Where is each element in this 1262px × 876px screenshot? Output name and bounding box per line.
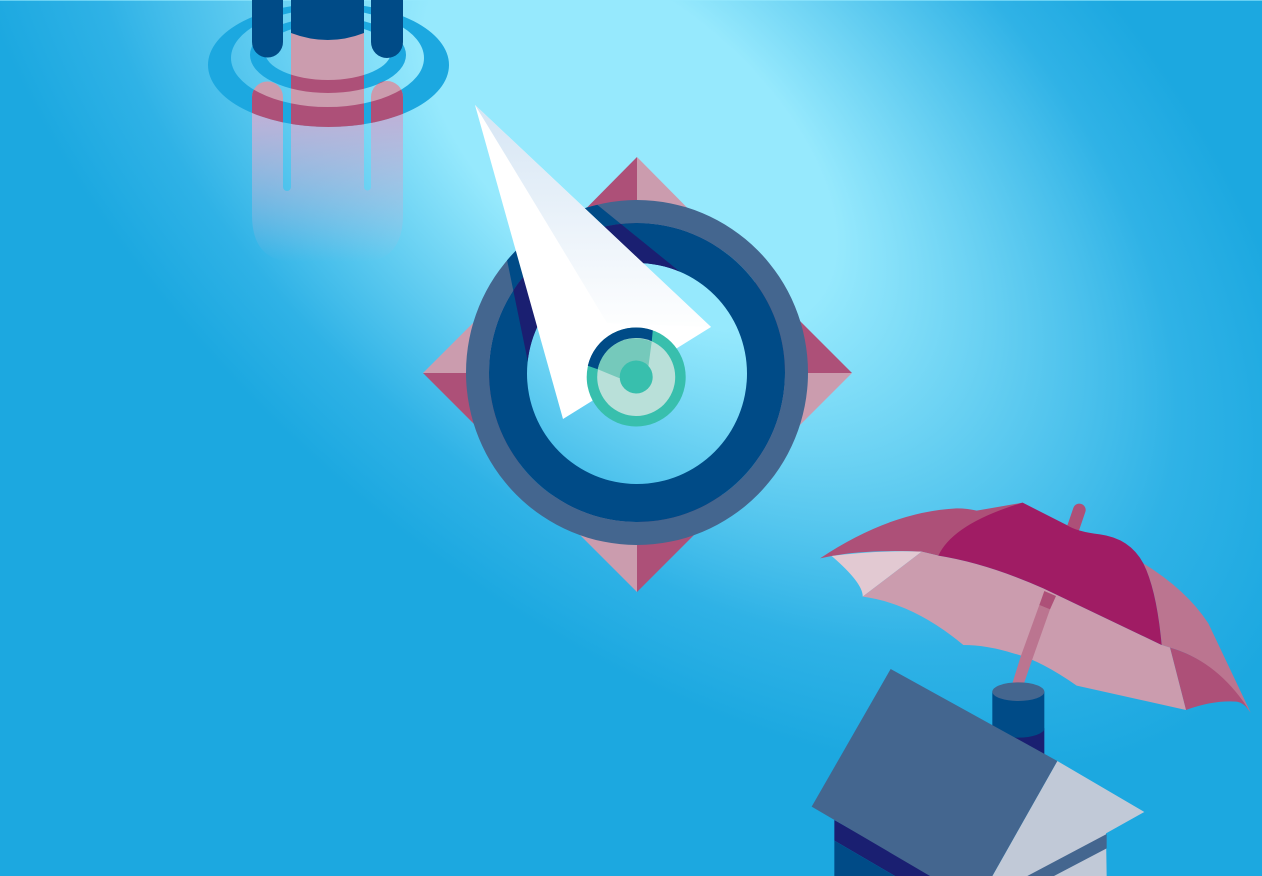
- right panel: [1143, 563, 1251, 713]
- centre leg: [291, 0, 364, 40]
- needle: [475, 105, 711, 419]
- main pink panel: [863, 552, 1186, 710]
- compass: [423, 105, 852, 592]
- back left panel: [820, 503, 1023, 558]
- left leg: [252, 0, 283, 57]
- roof: [812, 669, 1057, 876]
- chimney: [992, 682, 1044, 755]
- shaft seen through canopy: [1012, 591, 1056, 683]
- right gable and wall: [992, 761, 1144, 876]
- right leg: [371, 0, 403, 58]
- umbrella shaft top: [1063, 510, 1079, 557]
- house: [812, 669, 1144, 876]
- compass points: [423, 157, 852, 592]
- right lower panel: [1170, 648, 1251, 713]
- pink leg reflection: [252, 33, 403, 127]
- needle shadow: [507, 204, 680, 362]
- outer ripple: [208, 3, 449, 127]
- inner ripple: [250, 17, 406, 93]
- compass hub: [587, 327, 686, 426]
- figure legs reflected in water ripples: [208, 0, 449, 262]
- left wall: [834, 820, 933, 876]
- faded leg reflection: [252, 110, 403, 262]
- umbrella: [820, 503, 1251, 713]
- light left panel: [832, 551, 922, 597]
- compass ring: [466, 200, 808, 545]
- dark top panel: [938, 503, 1162, 645]
